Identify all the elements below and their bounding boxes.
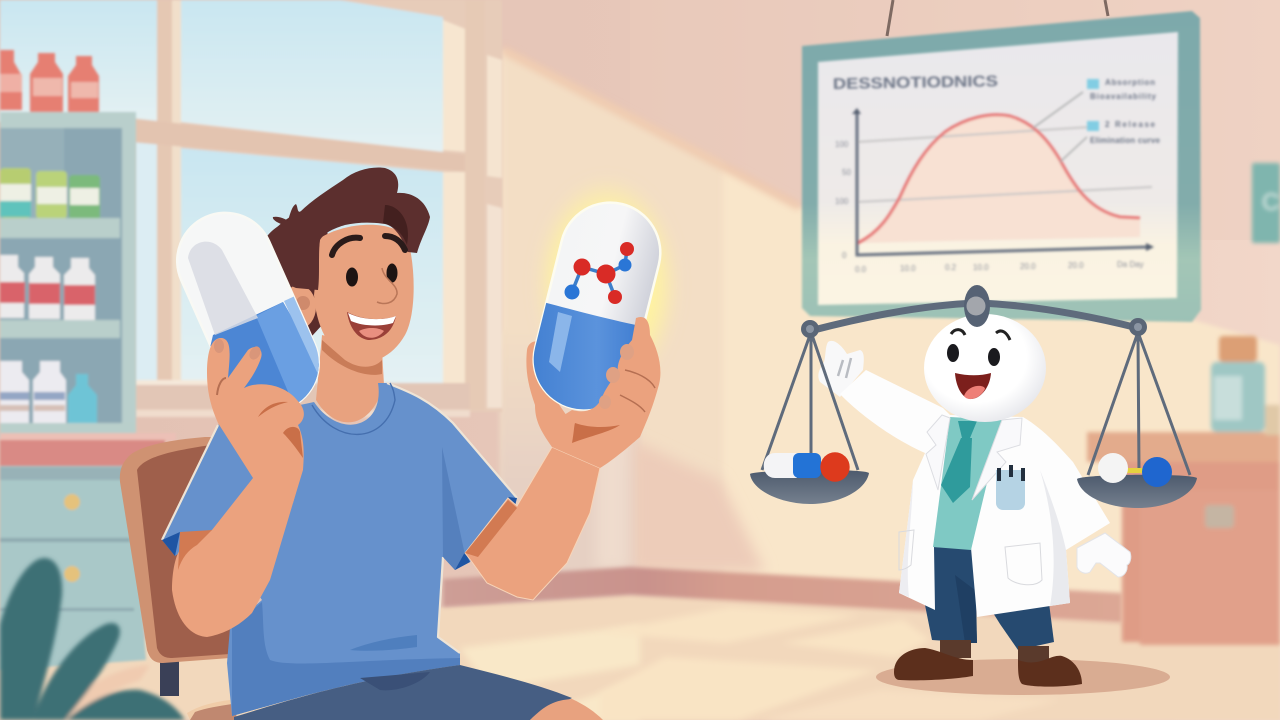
right hand fingers xyxy=(551,317,660,468)
right capsule xyxy=(532,201,662,411)
neck xyxy=(316,335,384,422)
chart xyxy=(833,73,1161,274)
axis labels: 20.0 xyxy=(1068,261,1084,270)
legend xyxy=(1087,78,1161,145)
axis labels: 100 xyxy=(835,140,849,149)
right palm xyxy=(526,341,590,450)
right counter and bottle xyxy=(1087,163,1280,645)
coat pockets xyxy=(899,530,1042,585)
axis labels: 0.2 xyxy=(945,263,957,272)
beam xyxy=(810,303,1138,331)
lapels xyxy=(926,415,1022,500)
legend: Elimination curve xyxy=(1090,136,1161,145)
mouth xyxy=(347,312,396,340)
bottle xyxy=(1211,336,1265,432)
axis labels: Da Day xyxy=(1117,260,1144,269)
right hand xyxy=(1077,533,1131,577)
cabinet xyxy=(0,112,136,438)
wall sign xyxy=(1252,163,1280,243)
lower leg xyxy=(530,699,603,720)
molecule xyxy=(564,242,634,304)
legs and shoes xyxy=(894,540,1082,687)
nose xyxy=(377,268,397,303)
t-shirt xyxy=(162,383,517,716)
teal shirt and tie xyxy=(933,417,1002,550)
lower bottles row xyxy=(0,361,97,425)
axis labels: 20.0 xyxy=(1020,262,1036,271)
axis labels: 50 xyxy=(842,168,851,177)
right arm xyxy=(465,447,600,600)
axis labels: 0 xyxy=(842,251,847,260)
balance scale xyxy=(750,285,1197,508)
person xyxy=(162,168,679,720)
window panes xyxy=(0,0,443,384)
axis labels: 10.0 xyxy=(973,263,989,272)
hair xyxy=(263,168,430,290)
floor shadow xyxy=(876,659,1170,695)
right pan contents xyxy=(1098,453,1172,487)
eyebrows xyxy=(332,238,360,255)
medicine shelf xyxy=(0,50,136,438)
ear xyxy=(282,285,316,329)
baseboard xyxy=(443,567,1122,623)
top shelf bottles xyxy=(0,50,99,114)
shorts xyxy=(234,665,572,720)
legend: 2 Release xyxy=(1105,120,1156,129)
axis labels: 10.0 xyxy=(900,264,916,273)
white bottles row xyxy=(0,255,95,320)
left capsule xyxy=(176,212,320,403)
window xyxy=(0,0,502,417)
left arm xyxy=(172,467,303,637)
legend: Absorption xyxy=(1105,78,1155,87)
legend: Bioavailability xyxy=(1090,92,1157,101)
left pan contents xyxy=(764,452,850,482)
lab coat xyxy=(840,370,1110,617)
axis labels xyxy=(835,140,1144,274)
right pan xyxy=(1077,475,1197,508)
left hand raised xyxy=(818,341,864,397)
hair back xyxy=(264,205,345,336)
sunlit wall xyxy=(503,50,1280,650)
chart title: DESSNOTIODNICS xyxy=(833,73,998,93)
scale strings xyxy=(762,335,858,470)
pivot xyxy=(964,285,990,327)
hanging chart poster xyxy=(802,0,1201,322)
plant xyxy=(0,558,185,720)
axis labels: 100 xyxy=(835,197,849,206)
jars row xyxy=(0,168,100,221)
chair xyxy=(120,437,238,720)
right capsule glow xyxy=(535,177,679,393)
head xyxy=(924,314,1046,422)
wall sign: C xyxy=(1262,189,1279,216)
left pan xyxy=(750,470,869,504)
eyes xyxy=(346,268,358,286)
mascot doctor with balance scale xyxy=(750,285,1197,695)
floor xyxy=(0,595,1280,720)
left hand xyxy=(207,338,304,503)
chest pocket and pens xyxy=(996,465,1025,510)
axis labels: 0.0 xyxy=(855,265,867,274)
face xyxy=(263,168,430,363)
counter and drawers xyxy=(0,433,176,670)
